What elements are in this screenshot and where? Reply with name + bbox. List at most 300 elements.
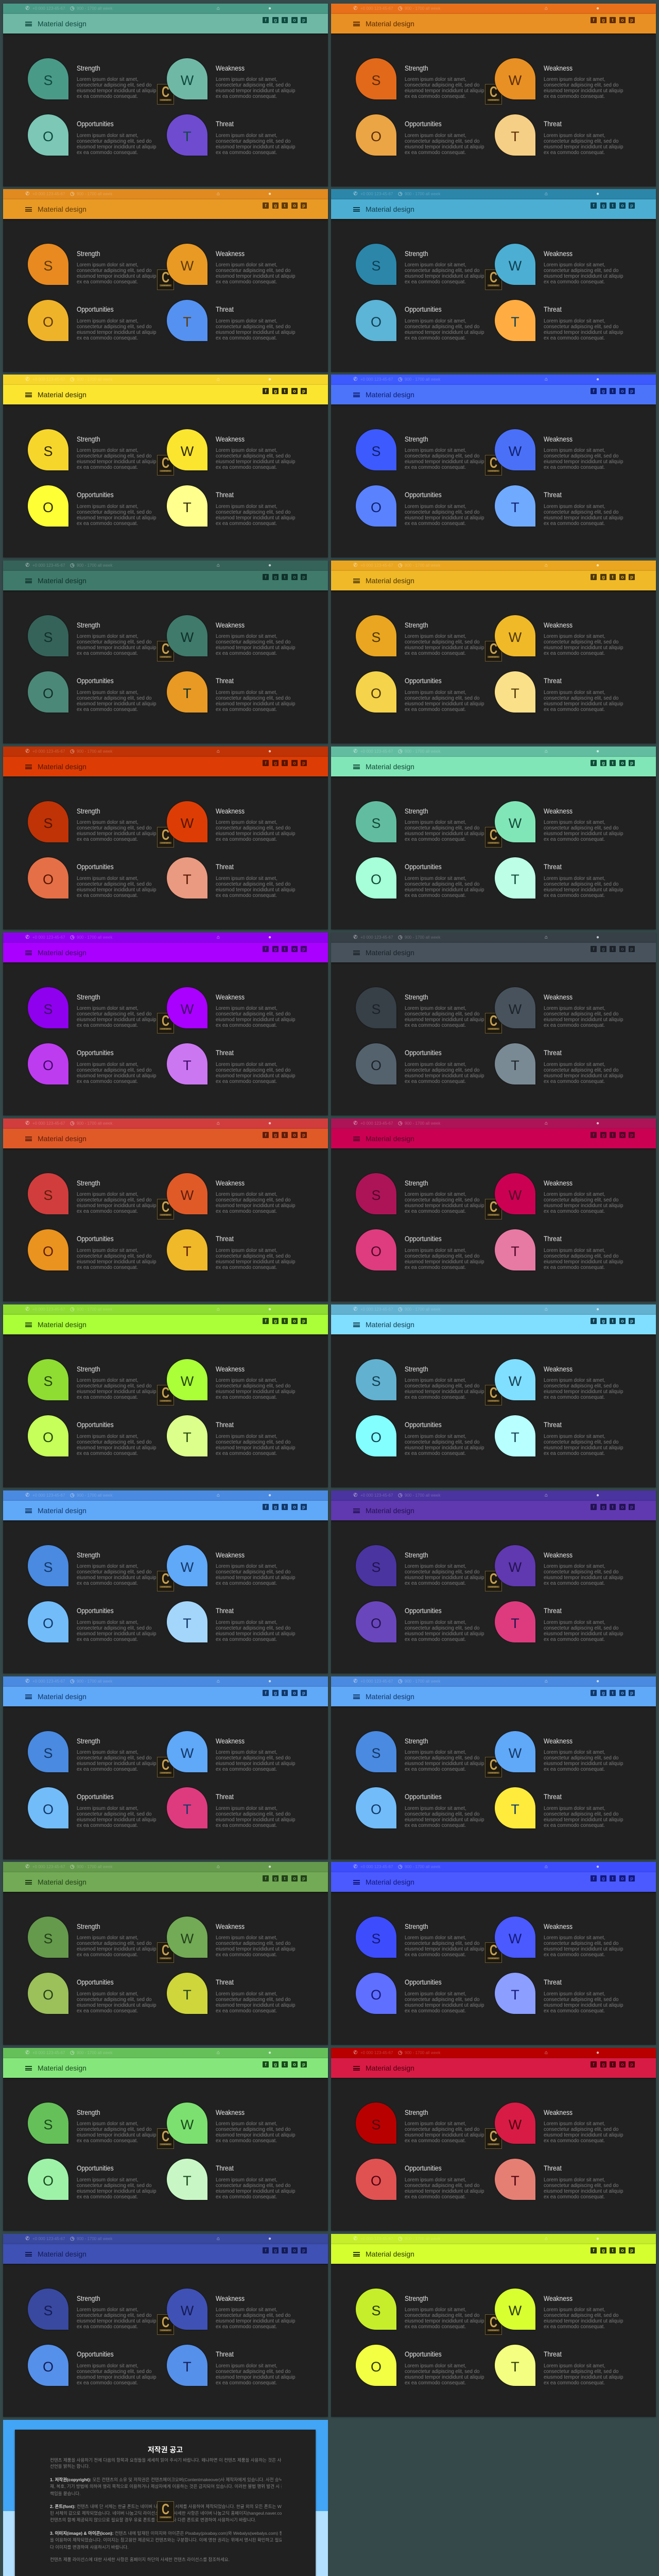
strength text (405, 262, 484, 285)
top bar: ● (596, 2050, 599, 2056)
strength text (405, 448, 484, 470)
threat text (216, 1806, 296, 1828)
strength text (77, 2121, 157, 2144)
drop T: T (511, 1244, 519, 1259)
top bar: ● (596, 749, 599, 754)
drop T: T (183, 1430, 192, 1445)
drop T (495, 1601, 535, 1642)
threat text: consectetur adipiscing elit, sed do (544, 1625, 618, 1631)
intro paragraph (15, 2430, 316, 2481)
header bar: f (593, 574, 594, 580)
top bar: +0 000 123-45-67 (360, 935, 393, 940)
header bar: f (265, 1132, 267, 1138)
opportunities title: Opportunities (405, 1048, 442, 1057)
header bar: f (265, 18, 267, 23)
header bar: p (630, 1876, 633, 1881)
weakness text (544, 1935, 623, 1958)
header bar: p (630, 946, 633, 952)
panel: card 13 red orange (3, 1118, 328, 1301)
weakness text: consectetur adipiscing elit, sed do (216, 1569, 290, 1575)
weakness title: Weakness (544, 64, 573, 72)
drop S: S (43, 816, 53, 831)
threat text: Lorem ipsum dolor sit amet, (544, 1434, 605, 1439)
header bar: g (274, 1132, 277, 1138)
drop S: S (43, 258, 53, 274)
threat text: eiusmod tempor incididunt ut aliquip (216, 330, 296, 335)
top bar: ● (596, 377, 599, 382)
threat text (544, 2363, 623, 2386)
strength text (405, 1378, 484, 1400)
header bar: f (593, 18, 594, 23)
drop W: W (181, 816, 194, 831)
opportunities text: eiusmod tempor incididunt ut aliquip (77, 1817, 157, 1823)
threat text: eiusmod tempor incididunt ut aliquip (544, 330, 623, 335)
strength text: consectetur adipiscing elit, sed do (77, 1755, 151, 1761)
header bar: f (593, 1318, 594, 1324)
opportunities text: consectetur adipiscing elit, sed do (405, 1067, 479, 1073)
opportunities text: eiusmod tempor incididunt ut aliquip (405, 1631, 484, 1637)
weakness text: eiusmod tempor incididunt ut aliquip (544, 645, 623, 651)
weakness text: Lorem ipsum dolor sit amet, (544, 2307, 605, 2313)
weakness text (216, 1192, 296, 1214)
weakness text: ex ea commodo consequat. (544, 2138, 605, 2144)
drop W: W (181, 444, 194, 459)
opportunities text: eiusmod tempor incididunt ut aliquip (405, 1259, 484, 1265)
weakness title: Weakness (544, 1922, 573, 1930)
drop W (167, 987, 207, 1028)
strength text: eiusmod tempor incididunt ut aliquip (405, 88, 484, 94)
watermark badge: C (490, 1571, 497, 1587)
threat title: Threat (216, 1420, 234, 1429)
drop T: T (511, 872, 519, 887)
strength text: ex ea commodo consequat. (405, 2324, 466, 2330)
threat text: eiusmod tempor incididunt ut aliquip (544, 2189, 623, 2194)
threat text: Lorem ipsum dolor sit amet, (216, 1062, 278, 1067)
drop O (28, 2159, 68, 2200)
header bar (331, 199, 656, 219)
header bar: g (602, 574, 605, 580)
top bar (3, 1862, 328, 1872)
strength text: Lorem ipsum dolor sit amet, (405, 2121, 466, 2127)
strength text: eiusmod tempor incididunt ut aliquip (77, 1203, 157, 1209)
top bar (3, 2234, 328, 2244)
drop T (495, 114, 535, 156)
top bar: ✆ (353, 6, 357, 11)
font paragraph: 컨텐츠의 함께 제공되지 않으므로 필요할 경우 유료 폰트를 구입하거나 다른 폰트로 변경하여 사용하시기 바랍니다. (50, 2517, 256, 2522)
strength title: Strength (77, 2108, 100, 2116)
threat text: consectetur adipiscing elit, sed do (544, 324, 618, 330)
weakness text: ex ea commodo consequat. (544, 1023, 605, 1028)
drop W (167, 801, 207, 842)
strength text: ex ea commodo consequat. (77, 837, 138, 842)
opportunities text: eiusmod tempor incididunt ut aliquip (77, 701, 157, 707)
weakness text: consectetur adipiscing elit, sed do (544, 1197, 618, 1203)
header bar: g (602, 2062, 605, 2067)
strength title: Strength (77, 2294, 100, 2302)
header bar: o (621, 2062, 624, 2067)
strength text: ex ea commodo consequat. (405, 1209, 466, 1214)
drop S (356, 1545, 396, 1586)
opportunities text: eiusmod tempor incididunt ut aliquip (77, 144, 157, 150)
strength text: consectetur adipiscing elit, sed do (405, 2127, 479, 2132)
threat text: consectetur adipiscing elit, sed do (216, 139, 290, 144)
top bar (3, 2048, 328, 2058)
drop O: O (43, 1616, 54, 1631)
opportunities text: consectetur adipiscing elit, sed do (405, 324, 479, 330)
threat text: eiusmod tempor incididunt ut aliquip (544, 1817, 623, 1823)
panel: card 16 cyan (331, 1304, 656, 1487)
threat text: ex ea commodo consequat. (544, 521, 605, 527)
threat text (544, 1806, 623, 1828)
header bar: f (265, 203, 267, 208)
weakness text: consectetur adipiscing elit, sed do (216, 2313, 290, 2318)
opportunities text: ex ea commodo consequat. (405, 1823, 466, 1828)
top bar: ✆ (25, 563, 29, 568)
threat title: Threat (544, 1978, 562, 1986)
drop T (495, 300, 535, 341)
weakness title: Weakness (216, 249, 245, 258)
panel: card 18 indigo (331, 1490, 656, 1673)
watermark badge (157, 84, 174, 105)
top bar: +0 000 123-45-67 (360, 377, 393, 382)
weakness text: Lorem ipsum dolor sit amet, (544, 1378, 605, 1383)
drop S: S (43, 1745, 53, 1761)
drop S: S (43, 2117, 53, 2132)
header bar: g (274, 574, 277, 580)
top bar: 900 - 1700 all week (77, 1493, 112, 1498)
strength text: Lorem ipsum dolor sit amet, (405, 1192, 466, 1197)
drop W (167, 615, 207, 656)
threat title: Threat (544, 2350, 562, 2358)
top bar: +0 000 123-45-67 (32, 1307, 65, 1312)
header bar: f (593, 946, 594, 952)
watermark badge (485, 1757, 502, 1777)
opportunities text: Lorem ipsum dolor sit amet, (405, 1806, 466, 1811)
watermark badge: CONTENTS (161, 2329, 170, 2331)
drop O: O (43, 686, 54, 701)
strength title: Strength (77, 1179, 100, 1187)
strength text: ex ea commodo consequat. (77, 1023, 138, 1028)
threat text: eiusmod tempor incididunt ut aliquip (216, 1631, 296, 1637)
threat title: Threat (216, 490, 234, 499)
header bar: t (284, 18, 285, 23)
opportunities text (405, 2363, 484, 2386)
strength text: eiusmod tempor incididunt ut aliquip (405, 645, 484, 651)
strength text (77, 1006, 157, 1028)
weakness title: Weakness (216, 2108, 245, 2116)
drop W (495, 429, 535, 470)
weakness text: eiusmod tempor incididunt ut aliquip (216, 1389, 296, 1395)
threat text (216, 2177, 296, 2200)
header bar: o (621, 18, 624, 23)
threat text: ex ea commodo consequat. (216, 1823, 277, 1828)
strength text: Lorem ipsum dolor sit amet, (77, 2121, 138, 2127)
strength text (77, 634, 157, 656)
weakness text (216, 2307, 296, 2330)
strength title: Strength (405, 2294, 428, 2302)
drop W: W (181, 1560, 194, 1575)
drop T (495, 1787, 535, 1828)
top bar: ✆ (353, 749, 357, 754)
strength text: ex ea commodo consequat. (77, 465, 138, 470)
threat text: consectetur adipiscing elit, sed do (216, 696, 290, 701)
strength text: Lorem ipsum dolor sit amet, (405, 1750, 466, 1755)
top bar: ● (268, 1121, 271, 1126)
watermark badge: CONTENTS (161, 656, 170, 658)
weakness text: Lorem ipsum dolor sit amet, (544, 1006, 605, 1011)
threat text (544, 318, 623, 341)
drop T: T (511, 686, 519, 701)
opportunities title: Opportunities (77, 490, 114, 499)
watermark badge (157, 827, 174, 848)
opportunities title: Opportunities (77, 862, 114, 871)
top bar: ⌂ (545, 749, 548, 754)
opportunities text: ex ea commodo consequat. (77, 707, 138, 713)
threat text: Lorem ipsum dolor sit amet, (544, 1620, 605, 1625)
weakness title: Weakness (216, 64, 245, 72)
drop S: S (371, 1745, 381, 1761)
weakness text: ex ea commodo consequat. (216, 94, 277, 99)
top bar: ● (596, 563, 599, 568)
drop O: O (43, 129, 54, 144)
drop O (356, 2345, 396, 2386)
weakness title: Weakness (544, 249, 573, 258)
weakness text: consectetur adipiscing elit, sed do (544, 1941, 618, 1946)
opportunities title: Opportunities (405, 1978, 442, 1986)
drop T (167, 1415, 207, 1456)
weakness title: Weakness (216, 621, 245, 629)
panel: card 22 electric blue (331, 1862, 656, 2045)
watermark badge (157, 2128, 174, 2149)
strength text: consectetur adipiscing elit, sed do (405, 825, 479, 831)
weakness text: consectetur adipiscing elit, sed do (544, 2313, 618, 2318)
strength text: consectetur adipiscing elit, sed do (77, 268, 151, 274)
top bar: ✆ (25, 377, 29, 382)
watermark badge: CONTENTS (489, 1957, 498, 1959)
strength text: Lorem ipsum dolor sit amet, (77, 2307, 138, 2313)
top bar: +0 000 123-45-67 (360, 749, 393, 754)
drop T: T (183, 686, 192, 701)
drop T (167, 1601, 207, 1642)
threat text: ex ea commodo consequat. (544, 2380, 605, 2386)
watermark badge: CONTENTS (161, 842, 170, 844)
header bar: o (293, 946, 296, 952)
drop W (167, 1545, 207, 1586)
drop W (495, 1173, 535, 1214)
drop W (167, 1731, 207, 1772)
weakness text: Lorem ipsum dolor sit amet, (216, 1935, 278, 1941)
top bar: ⌂ (217, 2050, 220, 2056)
header bar: t (284, 574, 285, 580)
top bar: ✆ (353, 2236, 357, 2242)
opportunities title: Opportunities (405, 120, 442, 128)
drop T (495, 2345, 535, 2386)
header bar: t (612, 2248, 614, 2253)
watermark badge: C (490, 1757, 497, 1773)
top bar: ◷ (70, 1493, 75, 1498)
header bar: Material design (38, 20, 86, 28)
header bar: p (302, 1876, 305, 1881)
top bar: 900 - 1700 all week (77, 935, 112, 940)
opportunities text: consectetur adipiscing elit, sed do (77, 139, 151, 144)
threat text: consectetur adipiscing elit, sed do (216, 1625, 290, 1631)
drop O: O (43, 872, 54, 887)
top bar: ✆ (25, 1121, 29, 1126)
opportunities text: consectetur adipiscing elit, sed do (77, 1811, 151, 1817)
weakness text: consectetur adipiscing elit, sed do (216, 453, 290, 459)
strength text: eiusmod tempor incididunt ut aliquip (405, 1575, 484, 1581)
drop T: T (511, 2359, 519, 2375)
threat text (216, 1434, 296, 1456)
drop T (167, 1787, 207, 1828)
top bar: 900 - 1700 all week (77, 2050, 112, 2055)
strength title: Strength (405, 249, 428, 258)
header bar: o (621, 203, 624, 208)
drop S (356, 429, 396, 470)
watermark badge: CONTENTS (161, 1400, 170, 1402)
drop W (495, 1359, 535, 1400)
weakness text: eiusmod tempor incididunt ut aliquip (216, 274, 296, 279)
watermark badge: C (490, 827, 497, 843)
strength text: eiusmod tempor incididunt ut aliquip (77, 2132, 157, 2138)
threat text: Lorem ipsum dolor sit amet, (544, 2177, 605, 2183)
drop T (495, 1415, 535, 1456)
header bar: p (630, 1132, 633, 1138)
drop W: W (181, 1002, 194, 1017)
opportunities text: consectetur adipiscing elit, sed do (405, 1439, 479, 1445)
weakness text: eiusmod tempor incididunt ut aliquip (544, 1761, 623, 1767)
weakness text: eiusmod tempor incididunt ut aliquip (216, 1761, 296, 1767)
drop S: S (371, 444, 381, 459)
header bar: p (302, 1318, 305, 1324)
drop T (167, 485, 207, 527)
threat text: eiusmod tempor incididunt ut aliquip (544, 515, 623, 521)
header bar: g (274, 1876, 277, 1881)
watermark badge: C (490, 1385, 497, 1401)
drop W (495, 801, 535, 842)
drop W: W (509, 630, 522, 645)
top bar: +0 000 123-45-67 (360, 1493, 393, 1498)
drop W: W (181, 1374, 194, 1389)
top bar: ● (268, 2050, 271, 2056)
drop W (495, 615, 535, 656)
opportunities text: consectetur adipiscing elit, sed do (405, 882, 479, 887)
threat text: ex ea commodo consequat. (216, 893, 277, 899)
opportunities text: consectetur adipiscing elit, sed do (405, 1253, 479, 1259)
strength text: eiusmod tempor incididunt ut aliquip (77, 1575, 157, 1581)
header bar: p (302, 203, 305, 208)
opportunities text: consectetur adipiscing elit, sed do (405, 1625, 479, 1631)
opportunities text: Lorem ipsum dolor sit amet, (77, 2363, 138, 2369)
top bar: +0 000 123-45-67 (360, 563, 393, 568)
opportunities text: ex ea commodo consequat. (405, 707, 466, 713)
top bar: 900 - 1700 all week (77, 1679, 112, 1684)
drop W (167, 2103, 207, 2144)
threat text: ex ea commodo consequat. (216, 2380, 277, 2386)
strength text: eiusmod tempor incididunt ut aliquip (405, 2318, 484, 2324)
drop O (356, 1601, 396, 1642)
weakness text: ex ea commodo consequat. (216, 279, 277, 285)
header bar: f (593, 2062, 594, 2067)
threat text: Lorem ipsum dolor sit amet, (544, 876, 605, 882)
drop S (28, 1731, 68, 1772)
drop S (356, 1731, 396, 1772)
threat title: Threat (544, 305, 562, 313)
drop O (28, 1787, 68, 1828)
drop O: O (43, 1244, 54, 1259)
top bar: ◷ (398, 2236, 403, 2242)
threat text: consectetur adipiscing elit, sed do (544, 510, 618, 515)
weakness title: Weakness (544, 1179, 573, 1187)
opportunities text: eiusmod tempor incididunt ut aliquip (77, 1445, 157, 1451)
strength text: Lorem ipsum dolor sit amet, (77, 262, 138, 268)
opportunities text: Lorem ipsum dolor sit amet, (77, 318, 138, 324)
watermark badge: CONTENTS (489, 2143, 498, 2145)
strength text: Lorem ipsum dolor sit amet, (77, 1006, 138, 1011)
watermark badge (485, 2128, 502, 2149)
weakness text: Lorem ipsum dolor sit amet, (544, 820, 605, 825)
drop O: O (371, 2359, 381, 2375)
opportunities text (405, 318, 484, 341)
opportunities text: ex ea commodo consequat. (77, 335, 138, 341)
threat text (216, 318, 296, 341)
threat text: Lorem ipsum dolor sit amet, (216, 133, 278, 139)
watermark badge: C (162, 455, 169, 471)
panel: card 19 blue pink (3, 1676, 328, 1859)
top bar: 900 - 1700 all week (77, 1121, 112, 1126)
opportunities title: Opportunities (77, 1420, 114, 1429)
weakness text: consectetur adipiscing elit, sed do (544, 639, 618, 645)
drop O (28, 1043, 68, 1084)
top bar: ⌂ (545, 2236, 548, 2242)
strength text (77, 1192, 157, 1214)
watermark badge: C (162, 84, 169, 100)
panel: card 6 royal blue (331, 375, 656, 557)
header bar: f (593, 760, 594, 766)
header bar: Material design (366, 20, 414, 28)
opportunities text (77, 876, 157, 899)
drop O: O (371, 872, 381, 887)
top bar: ✆ (353, 1493, 357, 1498)
threat text: eiusmod tempor incididunt ut aliquip (216, 2189, 296, 2194)
header bar: t (284, 1132, 285, 1138)
drop S (28, 1359, 68, 1400)
threat title: Threat (544, 1420, 562, 1429)
strength text: Lorem ipsum dolor sit amet, (77, 634, 138, 639)
drop T: T (183, 872, 192, 887)
top bar (331, 375, 656, 385)
weakness text (216, 448, 296, 470)
top bar: ● (268, 935, 271, 940)
top bar: ⌂ (545, 1493, 548, 1498)
threat text: Lorem ipsum dolor sit amet, (216, 2363, 278, 2369)
threat title: Threat (216, 1606, 234, 1615)
drop S: S (43, 1188, 53, 1203)
top bar (331, 1118, 656, 1129)
weakness text: Lorem ipsum dolor sit amet, (216, 77, 278, 82)
top bar: ✆ (353, 935, 357, 940)
top bar: ⌂ (545, 1121, 548, 1126)
header bar: o (293, 2248, 296, 2253)
threat text: Lorem ipsum dolor sit amet, (216, 1434, 278, 1439)
drop W: W (509, 444, 522, 459)
drop W: W (509, 1931, 522, 1946)
watermark badge: C (162, 2501, 169, 2518)
intro paragraph: 선언을 밝히는 합니다. (50, 2464, 90, 2469)
header bar: o (293, 1132, 296, 1138)
threat text: ex ea commodo consequat. (544, 1079, 605, 1084)
drop O (28, 1415, 68, 1456)
